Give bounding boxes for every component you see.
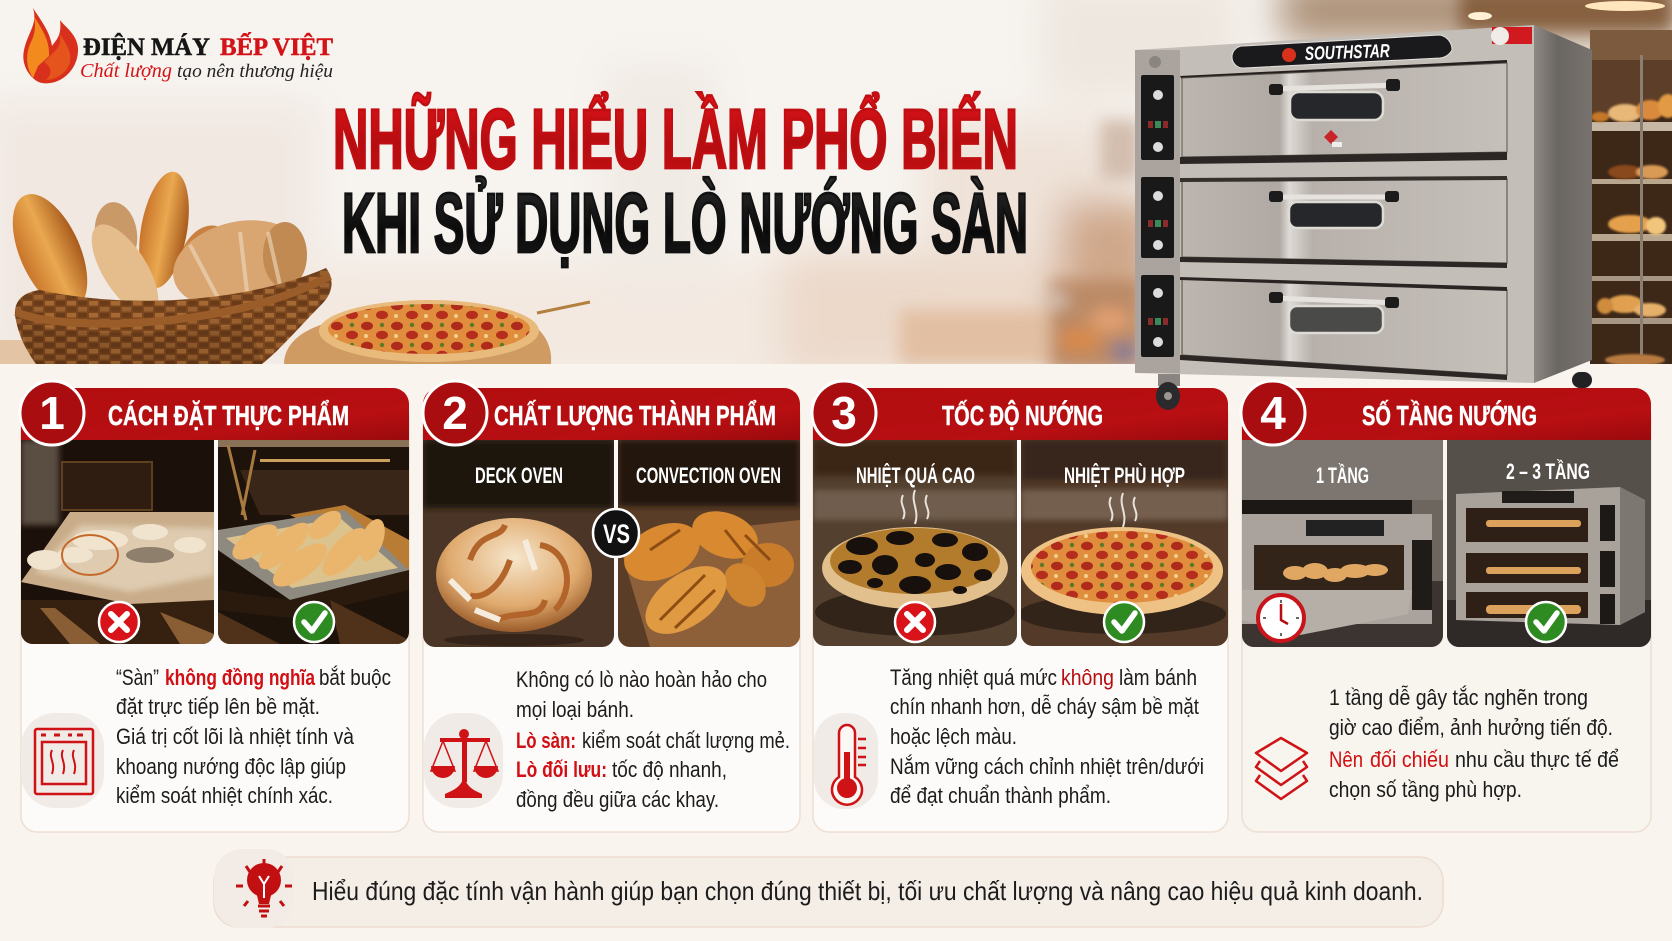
body text: Nắm vững cách chỉnh nhiệt trên/dưới [890,754,1204,779]
label: NHIỆT PHÙ HỢP [1064,463,1185,488]
takeaway bar [214,849,1443,928]
icon: light bulb [214,849,294,928]
body text: 1 tầng dễ gây tắc nghẽn trong [1329,685,1588,710]
door 3 [1180,277,1507,380]
icon: oven [21,713,104,808]
logo wordmark [83,32,333,61]
brand plate [1232,35,1452,68]
badge: correct [294,602,334,642]
card body [1242,400,1651,832]
body text: Không có lò nào hoàn hảo cho [516,667,767,692]
VS badge [593,509,639,557]
label: CONVECTION OVEN [636,463,781,488]
icon: thermometer [814,713,878,809]
oven logo and sticker [1149,27,1532,68]
card header [1242,388,1651,440]
body text: Lò sàn: [516,728,576,753]
number badge 4: 4 [1260,387,1286,439]
photo: 2-3 decks [1447,440,1651,647]
body text: Nên [1329,747,1363,772]
body text: kiểm soát nhiệt chính xác. [116,783,333,808]
body text [116,665,391,808]
label: 1 TẦNG [1316,463,1369,488]
icon: layers [1256,738,1307,799]
photo: one deck [1242,440,1443,647]
body text: chín nhanh hơn, dễ cháy sậm bề mặt [890,694,1200,719]
body text: Tăng nhiệt quá mức [890,665,1057,690]
icon: scales [424,713,503,808]
badge: correct [1104,602,1144,642]
body text: chọn số tầng phù hợp. [1329,777,1522,802]
photo: deck oven [423,440,614,647]
badge: wrong [99,602,139,642]
logo wordmark: BẾP VIỆT [220,32,333,61]
logo slogan [80,60,333,82]
casters [1156,372,1592,410]
body text: nhu cầu thực tế để [1455,747,1619,772]
photo: convection oven [615,440,800,648]
body text: kiểm soát chất lượng mẻ. [582,728,790,753]
logo slogan: Chất lượng [80,60,172,82]
background photo: blurred bakery [0,0,1672,390]
pizza on board [284,300,590,364]
control panels [1141,75,1174,357]
body text: mọi loại bánh. [516,697,634,722]
body text: không đồng nghĩa [165,665,315,690]
body text [890,665,1204,808]
brand plate: SOUTHSTAR [1304,41,1390,65]
card 3: tốc độ nướng [812,381,1228,832]
badge: correct [1526,602,1566,642]
heading: CHẤT LƯỢNG THÀNH PHẨM [494,400,776,431]
takeaway text: Hiểu đúng đặc tính vận hành giúp bạn chọn đúng thiết bị, tối ưu chất lượng và nâng cao hiệu quả kinh doanh. [312,876,1423,906]
logo slogan: tạo nên thương hiệu [177,61,333,82]
photo: too hot pizza [813,440,1017,646]
product: southstar three-deck oven [1135,25,1592,410]
number badge 1 [20,381,84,445]
body text: đối chiếu [1370,747,1449,772]
label: 2 – 3 TẦNG [1506,459,1590,484]
photo: correct placement [218,440,409,644]
icon: flame [23,8,78,83]
card body [21,400,409,832]
badge: clock [1258,595,1304,641]
body text: Giá trị cốt lõi là nhiệt tính và [116,724,354,749]
card body [423,400,800,832]
logo wordmark: ĐIỆN MÁY [83,33,210,61]
body text: “Sàn” [116,665,159,690]
body text: khoang nướng độc lập giúp [116,754,346,779]
body text: để đạt chuẩn thành phẩm. [890,783,1111,808]
label: DECK OVEN [475,463,563,488]
card header [813,388,1228,440]
photo: correct heat pizza [1018,440,1228,646]
card body [813,400,1228,832]
oven side panel [1534,25,1592,383]
body text: Lò đối lưu: [516,757,607,782]
card header [21,388,409,440]
VS badge: VS [603,519,630,549]
title: NHỮNG HIỂU LẦM PHỔ BIẾN [333,92,1018,186]
logo [23,8,333,83]
body text [516,667,790,812]
body text: không [1061,665,1114,690]
body text [1329,685,1619,802]
door 1 [1180,60,1507,164]
number badge 1: 1 [39,387,65,439]
bread loaves [0,168,312,326]
oven front frame [1135,25,1534,383]
wicker basket [15,268,332,364]
body text: đồng đều giữa các khay. [516,787,719,812]
body text: bắt buộc [319,665,391,690]
card 4: số tầng nướng [1241,381,1651,832]
card 2: chất lượng thành phẩm [423,381,800,832]
number badge 2: 2 [442,387,468,439]
door 2 [1180,176,1507,268]
background rack with pastries [1590,30,1672,366]
heading: SỐ TẦNG NƯỚNG [1362,399,1537,431]
photo: wrong placement [21,440,214,644]
card 1: cách đặt thực phẩm [20,381,409,832]
card header [423,388,800,440]
body text: đặt trực tiếp lên bề mặt. [116,694,320,719]
illustration: bread basket [0,168,590,364]
body text: giờ cao điểm, ảnh hưởng tiến độ. [1329,715,1613,740]
body text: hoặc lệch màu. [890,724,1017,749]
label: NHIỆT QUÁ CAO [856,463,975,488]
body text: tốc độ nhanh, [612,757,727,782]
number badge 3 [812,381,876,445]
body text: làm bánh [1119,665,1197,690]
heading: CÁCH ĐẶT THỰC PHẨM [108,400,349,431]
number badge 3: 3 [831,387,857,439]
heading: TỐC ĐỘ NƯỚNG [942,399,1103,431]
number badge 2 [423,381,487,445]
title: KHI SỬ DỤNG LÒ NƯỚNG SÀN [342,176,1028,270]
badge: wrong [895,602,935,642]
number badge 4 [1241,381,1305,445]
title [333,92,1028,270]
